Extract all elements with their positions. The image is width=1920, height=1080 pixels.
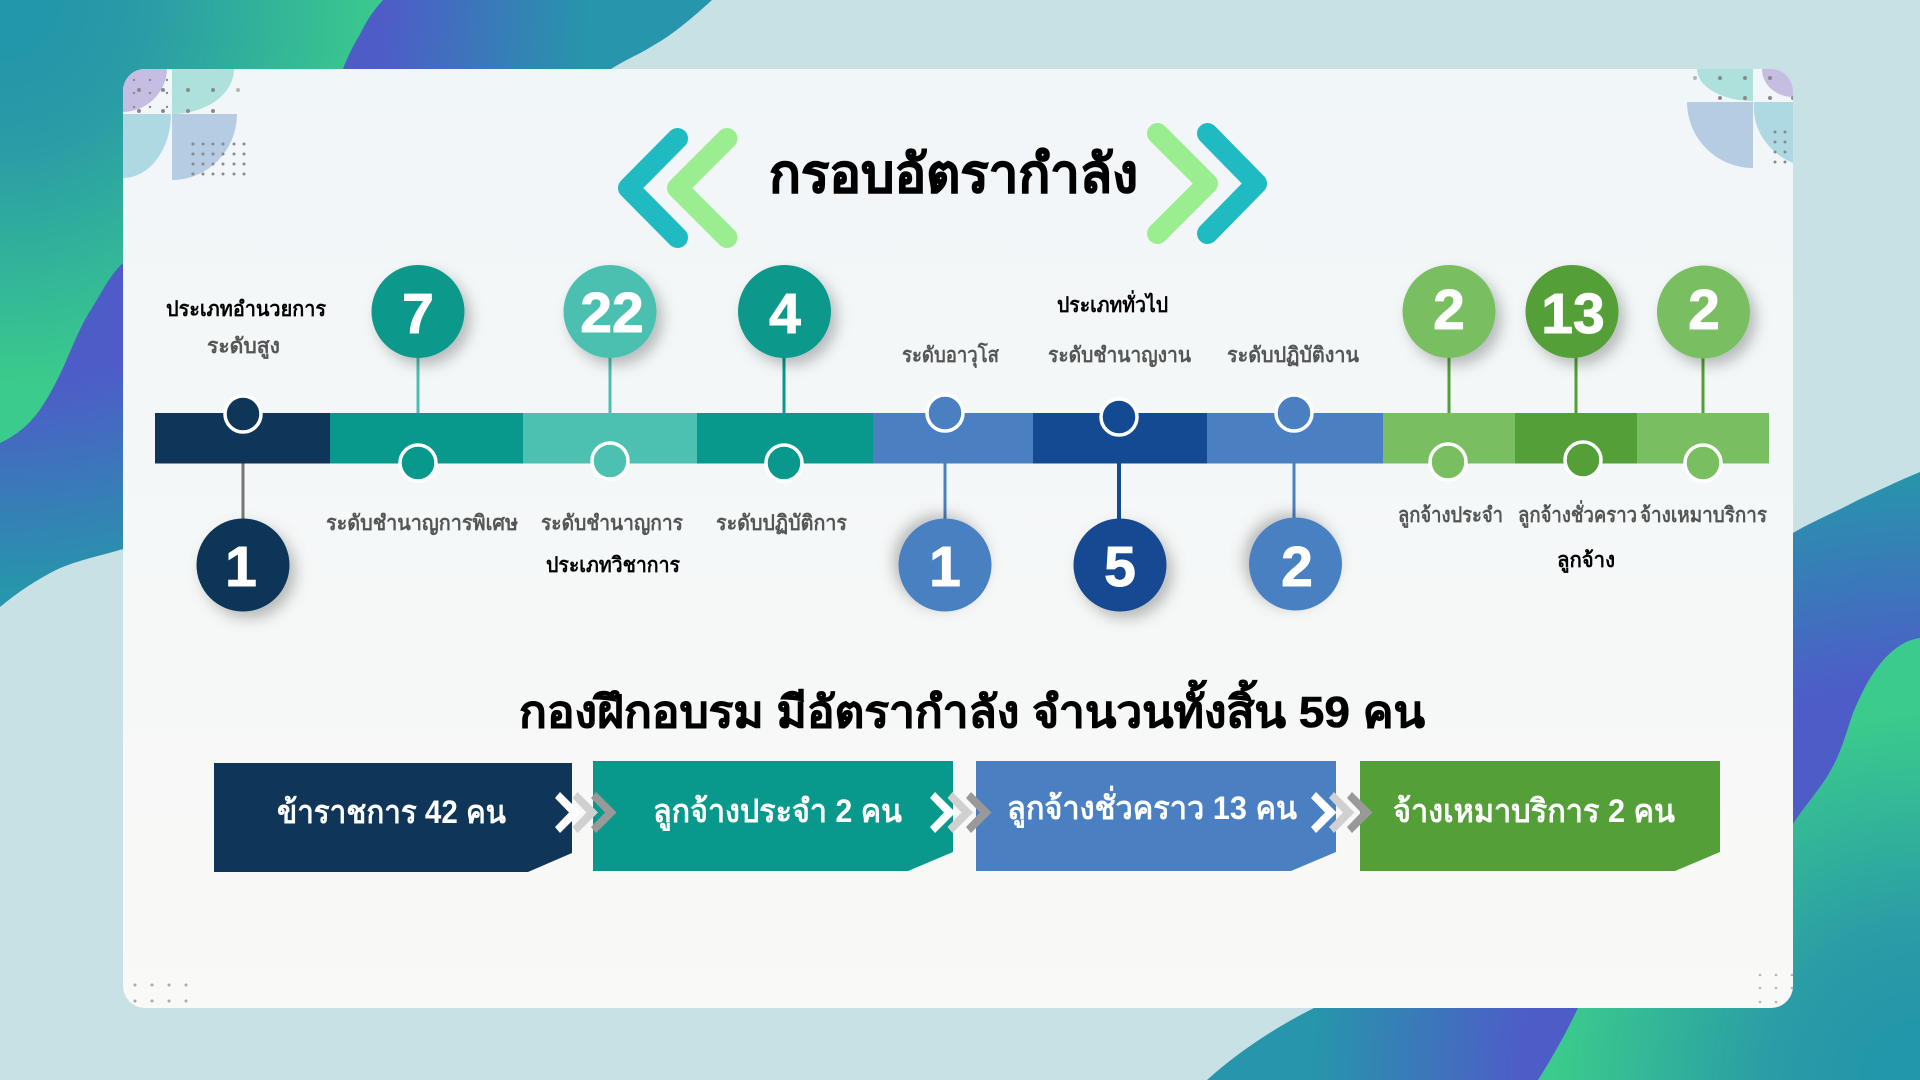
number badge: senior general 1 [898,518,992,612]
background: top-left green wave [0,0,383,443]
heading: total headcount: กองฝึกอบรม มีอัตรากำลัง จำนวนทั้งสิ้น 59 คน [519,679,1425,737]
number badge: contracted 2 [1657,266,1750,358]
number badge: general practitioner 2 [1249,518,1342,610]
summary box: temporary employees 13 [976,761,1336,871]
number badge: practitioner 4 [738,265,831,358]
number badge: permanent employee 2 [1402,265,1496,358]
number badge: expert general 5: 5 [1104,535,1136,599]
number badge: practitioner 4: 4 [769,282,801,346]
number badge: senior executive 1 [196,518,290,612]
label: employee category: ลูกจ้าง [1557,548,1615,574]
label: permanent employee: ลูกจ้างประจำ [1398,503,1503,529]
label: temporary employee: ลูกจ้างชั่วคราว [1518,499,1637,529]
number badge: general practitioner 2: 2 [1281,535,1313,599]
label: operational level: ระดับปฏิบัติงาน [1227,344,1360,367]
background: bottom-right green wave [1538,638,1920,1080]
decoration: bottom-right dots [1759,974,1793,1003]
summary box: civil servants 42 [214,763,572,872]
summary box: permanent employees 2: ลูกจ้างประจำ 2 คน [653,793,902,832]
number badge: temporary employee 13: 13 [1541,282,1605,346]
background: bottom-right blue wave [1207,472,1920,1080]
number badge: special expert 7 [372,265,464,358]
number badge: professional 22: 22 [580,281,644,345]
number badge: senior executive 1: 1 [225,535,257,599]
decoration: bottom-left dots [134,984,188,1002]
label: general category: ประเภททั่วไป [1057,289,1168,317]
label: senior general level: ระดับอาวุโส [902,342,999,369]
arrow: triple chevron 3 [1311,792,1372,833]
summary box: civil servants 42: ข้าราชการ 42 คน [277,794,506,830]
label: executive category: ประเภทอำนวยการ [166,298,327,321]
summary box: permanent employees 2 [593,761,953,871]
background: top-left blue wave [0,0,712,607]
label: special expert level: ระดับชำนาญการพิเศษ [326,512,518,536]
number badge: contracted 2: 2 [1688,278,1720,342]
number badge: temporary employee 13 [1526,265,1618,358]
number badge: permanent employee 2: 2 [1433,278,1465,342]
label: expert level: ระดับชำนาญการ [541,512,684,536]
label: senior level: ระดับสูง [207,335,280,360]
panel: main white card [123,69,1795,1008]
arrow: triple chevron 1 [555,792,616,833]
number badge: expert general 5 [1074,518,1166,612]
number badge: special expert 7: 7 [402,282,434,346]
number badge: senior general 1: 1 [929,535,961,599]
decoration: top-left corner shapes [123,69,246,180]
summary box: temporary employees 13: ลูกจ้างชั่วคราว 13 คน [1007,785,1297,829]
decoration: top-right corner shapes [1687,69,1795,168]
timeline: colored bar [155,413,1769,464]
icon: right double chevrons [1158,134,1256,234]
label: practitioner level: ระดับปฏิบัติการ [716,512,848,535]
arrow: triple chevron 2 [930,792,992,833]
timeline: marker dots [225,395,1721,481]
timeline: connector stems [243,356,1703,522]
label: skilled level: ระดับชำนาญงาน [1048,344,1192,368]
label: professional category: ประเภทวิชาการ [546,554,681,577]
summary box: contracted service 2 [1360,761,1720,871]
icon: left double chevrons [628,138,727,238]
label: contracted service: จ้างเหมาบริการ [1640,503,1768,527]
title: กรอบอัตรากำลัง [769,145,1138,204]
number badge: professional 22 [564,265,656,358]
summary box: contracted service 2: จ้างเหมาบริการ 2 คน [1393,793,1675,829]
